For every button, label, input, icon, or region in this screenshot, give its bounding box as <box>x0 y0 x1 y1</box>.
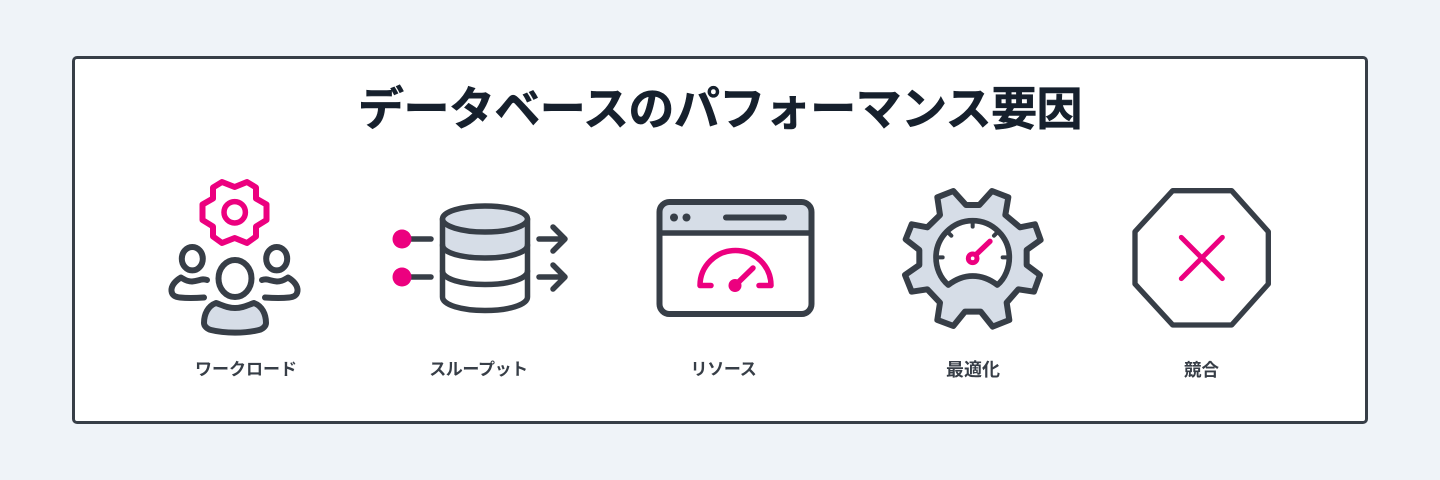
label: contention: 競合 <box>1184 360 1219 380</box>
icon: optimization gear with gauge <box>905 191 1041 327</box>
icon: throughput database <box>392 206 565 310</box>
panel: main frame <box>72 56 1368 424</box>
label: workload: ワークロード <box>195 360 297 379</box>
icon: contention stop octagon with cross <box>1135 191 1268 325</box>
label: throughput: スループット <box>429 360 528 379</box>
icon: resources window with gauge <box>659 202 812 314</box>
label: resources: リソース <box>691 360 756 379</box>
title: データベースのパフォーマンス要因 <box>358 83 1082 135</box>
label: optimization: 最適化 <box>946 360 1000 380</box>
icon: workload people with gear <box>171 182 298 333</box>
